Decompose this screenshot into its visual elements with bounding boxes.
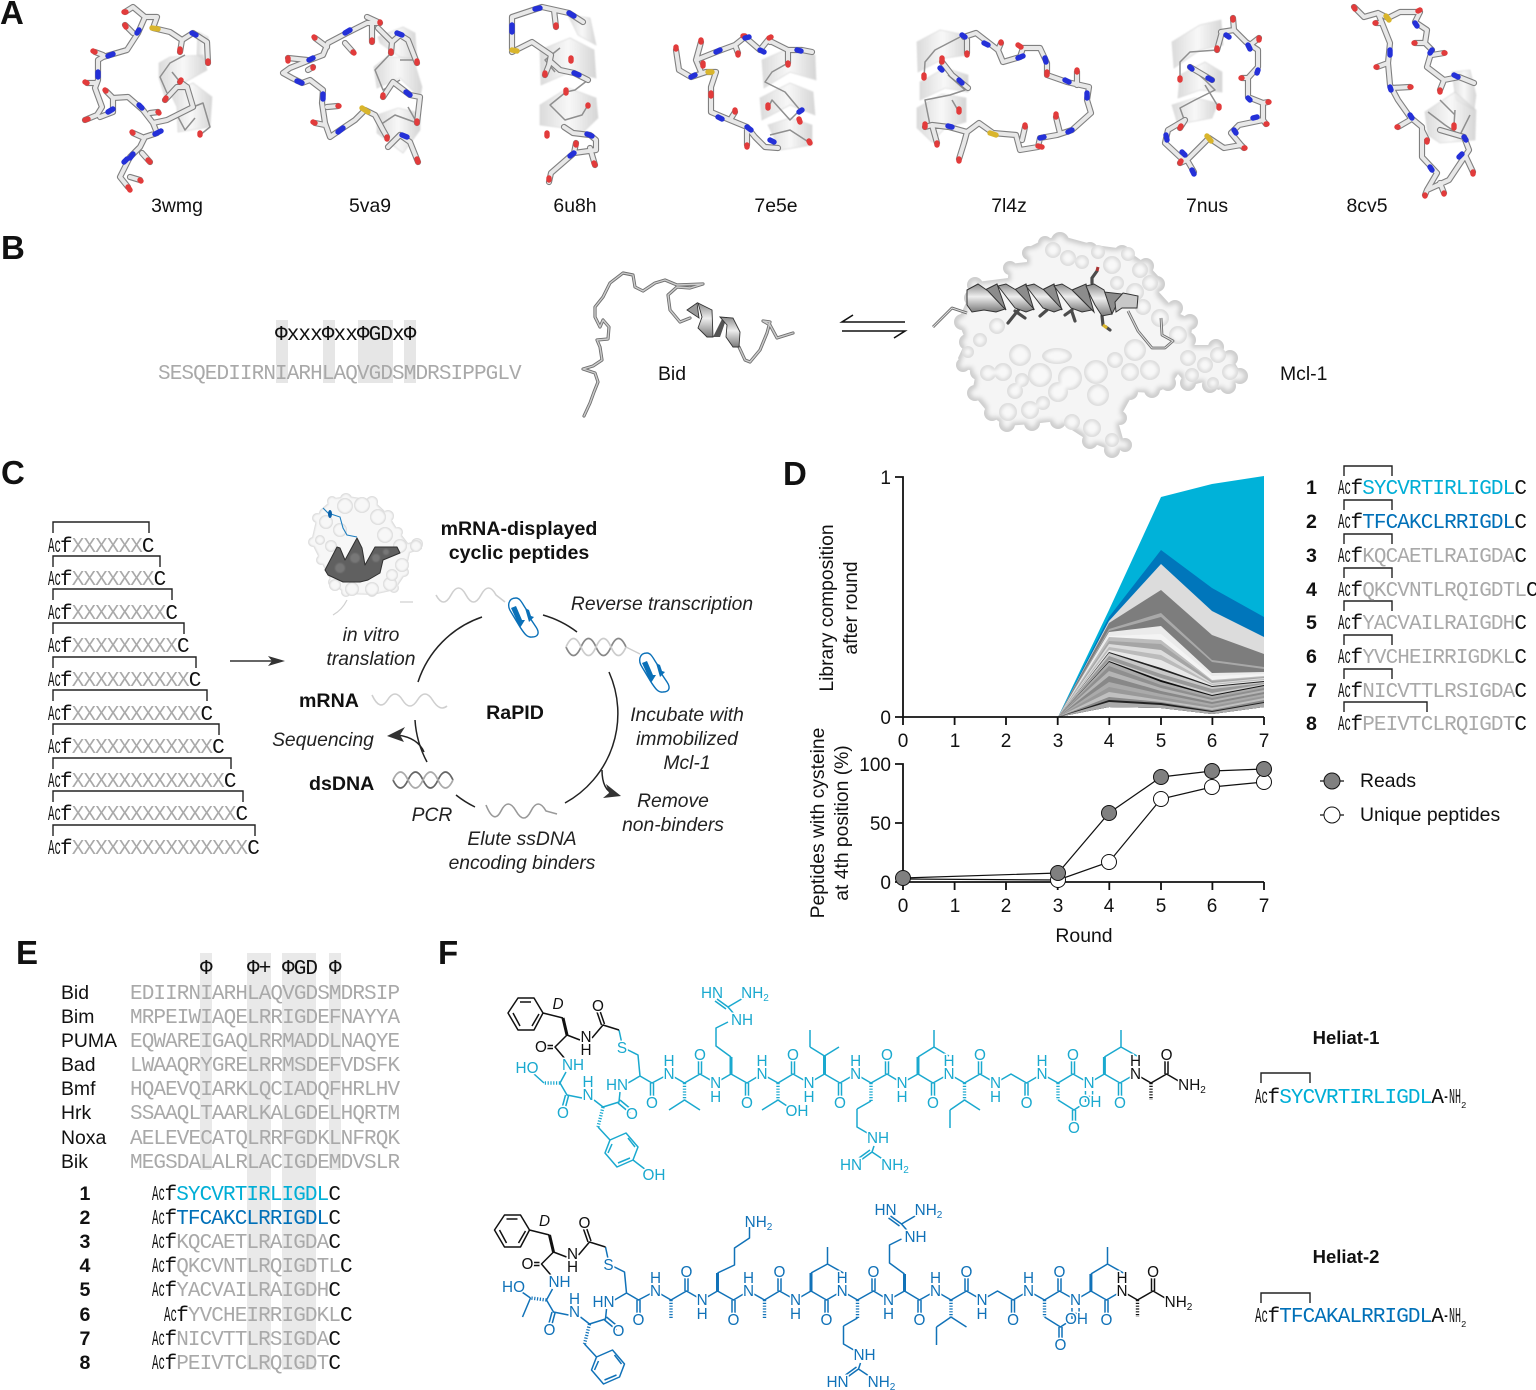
chart: peptides with cysteine at 4th position: 2 [1001,896,1011,917]
chart: library composition stacked area: 2 [1001,731,1011,752]
panel E: sequence alignment: Ac [152,1184,165,1207]
panel D: peptide sequence list: Ac [1338,512,1351,535]
icon: dsDNA with peptide (reverse transcription) [566,638,669,692]
panel D: peptide sequence list: 5 [1306,612,1317,634]
sequence: Heliat-1: -NH [1443,1087,1461,1110]
panel B: Bid sequence with motif: ΦxxxΦxxΦGDxΦ [275,324,417,347]
panel C: cyclic peptide library: Ac [48,603,61,626]
panel F: Heliat-2 chemical structure: N [567,1246,578,1263]
panel D: peptide sequence list: 8 [1306,713,1317,735]
panel E: sequence alignment: Φ+ [247,958,271,981]
chart: library composition stacked area: 4 [1104,731,1115,752]
panel D: peptide sequence list: Ac [1338,681,1351,704]
panel B: Mcl-1 surface with bound helix [933,232,1248,458]
panel D: peptide sequence list: fNICVTTLRSIGDAC [1350,681,1526,704]
panel F: Heliat-1 chemical structure: NNNNN [663,1066,1048,1083]
chart: library composition stacked area: 5 [1156,731,1166,752]
panel F: Heliat-1 chemical structure: NH [1178,1077,1200,1094]
panel E: sequence alignment: Ac [152,1353,165,1376]
icon: ssDNA wave [486,804,557,818]
icon: equilibrium arrows [842,315,905,338]
panel C: cyclic peptide library: fXXXXXXC [60,536,154,559]
panel E: sequence alignment: PUMA [61,1030,117,1052]
panel F: Heliat-2 chemical structure: O [544,1322,556,1339]
label: Bid: Bid [658,363,686,385]
panel F: Heliat-1 chemical structure: O [557,1105,569,1122]
panel F: Heliat-1 chemical structure: OH [643,1167,665,1184]
RaPID cycle ring [415,615,618,807]
panel F: Heliat-1 chemical structure: 2 [903,1165,909,1176]
cycle labels: dsDNA [309,773,374,795]
panel E: sequence alignment: Bad [61,1054,96,1076]
panel F: Heliat-2 chemical structure: H [1116,1270,1128,1287]
panel E: sequence alignment: 5 [80,1279,91,1301]
cycle labels: mRNA [299,690,359,712]
panel F: Heliat-2 chemical structure: NH [904,1229,927,1246]
panel E: sequence alignment: ΦGD [282,958,317,981]
icon: ribosome with nascent peptide [308,493,423,615]
panel A: PDB labels: 7l4z [991,195,1027,217]
icon: mRNA wave with peptide (top) [436,588,538,637]
panel E: sequence alignment: HQAEVQIARKLQCIADQFHRLHV [130,1079,400,1102]
chart: peptides with cysteine at 4th position: 0 [880,873,891,894]
panel F: Heliat-1 chemical structure: O [1161,1047,1173,1064]
panel B: Bid sequence with motif [158,320,522,386]
panel C: cyclic peptide library: Ac [48,569,61,592]
panel C: cyclic peptide library: Ac [48,636,61,659]
panel F: Heliat-1 chemical structure: NH [562,1057,584,1074]
panel F: Heliat-2 chemical structure: HO [502,1279,525,1296]
panel E: sequence alignment: fPEIVTCLRQIGDTC [164,1353,340,1376]
chart: library composition stacked area [817,468,1269,752]
panel F: Heliat-1 chemical structure: HHHHH [663,1053,1048,1070]
sequence: Heliat-2: Ac [1255,1306,1268,1329]
panel F: Heliat-2 chemical structure: HHHHH [650,1270,1034,1287]
cycle labels: Sequencing [272,730,374,751]
panel C: cyclic peptide library: fXXXXXXXXXXXXXXC [60,804,248,827]
panel F: Heliat-1 chemical structure: HN [606,1077,628,1094]
cycle labels: in vitro [343,625,400,646]
panel E: sequence alignment: fYVCHEIRRIGDKLC [176,1305,352,1328]
panel F: Heliat-1 chemical structure: HHHHH [710,1089,1095,1106]
chart: library composition stacked area: 6 [1207,731,1217,752]
panel C: cyclic peptide library: Ac [48,804,61,827]
panel E: sequence alignment: Φ [200,958,213,981]
panel F: Heliat-1 chemical structure: NH [741,985,763,1002]
chart: peptides with cysteine at 4th position: 1 [950,896,960,917]
panel E: sequence alignment: EDIIRNIARHLAQVGDSMDRSIP [130,983,399,1006]
sequence: Heliat-1: fSYCVRTIRLIGDLA [1268,1087,1444,1110]
panel C: cyclic peptide library: Ac [48,536,61,559]
panel label B: B [1,229,25,266]
panel F: Heliat-2 chemical structure: H [569,1291,580,1308]
panel E: sequence alignment: fKQCAETLRAIGDAC [164,1232,340,1255]
panel F: Heliat-1 chemical structure: NH [867,1130,889,1147]
panel C: cyclic peptide library: fXXXXXXXXXXXXXC [60,771,236,794]
panel E: sequence alignment: 4 [80,1255,91,1277]
chart: peptides with cysteine at 4th position: 3 [1053,896,1063,917]
panel F: Heliat-1 chemical structure: N [580,1029,592,1046]
chart: peptides with cysteine at 4th position: Peptides with cysteine [808,728,829,918]
heading: mRNA-displayed cyclic peptides: cyclic peptides [449,542,589,564]
panel F: Heliat-2 chemical structure: NH [1165,1294,1187,1311]
panel E: sequence alignment: EQWAREIGAQLRRMADDLNAQYE [130,1031,399,1054]
panel D: peptide sequence list: 4 [1306,579,1317,601]
panel label E: E [16,934,38,971]
panel E: sequence alignment: 1 [80,1183,91,1205]
cycle labels: immobilized [636,729,739,750]
panel F: Heliat-1 chemical structure: O [1068,1120,1080,1137]
chart: peptides with cysteine at 4th position: 50 [870,814,891,835]
panel E: sequence alignment: 7 [80,1328,91,1350]
panel F: Heliat-2 chemical structure: S [603,1257,614,1274]
panel D: peptide sequence list: 6 [1306,646,1317,668]
panel F: Heliat-1 chemical structure: HO [516,1060,539,1077]
chart: library composition stacked area: 3 [1053,731,1063,752]
panel F: Heliat-2 chemical structure: HN [874,1202,897,1219]
panel C: cyclic peptide library: fXXXXXXXXC [60,603,177,626]
panel F: Heliat-1 chemical structure: H [1130,1053,1141,1070]
sequence: Heliat-2: fTFCAKALRRIGDLA [1268,1306,1444,1329]
panel F: Heliat-2 chemical structure: O [613,1323,625,1340]
panel F: Heliat-2 chemical structure: H [567,1259,578,1276]
panel F: Heliat-1 chemical structure: OOOOO [694,1047,1079,1064]
chart: peptides with cysteine at 4th position: 6 [1207,896,1217,917]
icon: dsDNA helix [393,772,453,788]
chart: peptides with cysteine at 4th position: 5 [1156,896,1166,917]
chart: library composition stacked area: 7 [1259,731,1269,752]
chart: library composition stacked area: 0 [898,731,908,752]
panel A: PDB labels: 3wmg [151,195,203,217]
panel F: Heliat-1 chemical structure: NH [731,1012,753,1029]
panel F: Heliat-1 chemical structure: NH [881,1157,903,1174]
chart: peptides with cysteine at 4th position: 100 [859,755,891,776]
heading: Heliat-2: Heliat-2 [1313,1246,1379,1267]
panel D: peptide sequence list: 3 [1306,545,1317,567]
panel E: sequence alignment: Ac [164,1305,177,1328]
chart: library composition stacked area: Library composition [817,524,838,692]
label: Mcl-1: Mcl-1 [1280,363,1327,385]
panel C: cyclic peptide library: fXXXXXXXXXXXXC [60,737,224,760]
cycle labels: Remove [637,791,709,812]
cycle labels: Elute ssDNA [467,829,577,850]
panel D: peptide sequence list: 1 [1306,477,1317,499]
chart: library composition stacked area: 0 [880,708,891,729]
panel E: sequence alignment: fNICVTTLRSIGDAC [164,1329,340,1352]
panel A: PDB labels: 8cv5 [1347,195,1387,217]
legend: reads and unique peptides: Unique peptides [1360,804,1500,826]
panel D: peptide sequence list: 2 [1306,511,1317,533]
panel D: peptide sequence list: fKQCAETLRAIGDAC [1350,546,1526,569]
panel D: peptide sequence list: Ac [1338,647,1351,670]
panel F: Heliat-2 chemical structure [494,1202,1193,1390]
panel D: peptide sequence list: Ac [1338,546,1351,569]
panel C: cyclic peptide library: Ac [48,838,61,861]
panel F: Heliat-2 chemical structure: O [522,1256,534,1273]
panel C: cyclic peptide library: fXXXXXXXXXXXC [60,704,212,727]
panel F: Heliat-2 chemical structure: NNNNN [650,1283,1034,1300]
panel E: sequence alignment: fSYCVRTIRLIGDLC [164,1184,340,1207]
panel F: Heliat-2 chemical structure: N [1116,1283,1128,1300]
chart: peptides with cysteine at 4th position: at 4th position (%) [832,745,853,901]
panel A: structure 7l4z [917,30,1091,161]
panel A: PDB labels: 7nus [1186,195,1228,217]
panel E: sequence alignment [61,953,400,1376]
chart: library composition stacked area: 1 [950,731,960,752]
panel E: sequence alignment: Hrk [61,1102,91,1124]
sequence: Heliat-1: Ac [1255,1087,1268,1110]
panel F: Heliat-1 chemical structure: 2 [763,993,769,1004]
panel F: Heliat-1 chemical structure: H [580,1042,592,1059]
panel F: Heliat-2 chemical structure: N [569,1304,580,1321]
panel F: Heliat-1 chemical structure: OH [786,1103,808,1120]
panel E: sequence alignment: MEGSDALALRLACIGDEMDVSLR [130,1152,400,1175]
panel A: structure 7nus [1165,18,1269,174]
panel C: cyclic peptide library: fXXXXXXXXXXXXXXXC [60,838,259,861]
panel D: peptide sequence list: fSYCVRTIRLIGDLC [1350,478,1526,501]
cycle labels: Reverse transcription [571,594,753,615]
panel F: Heliat-1 chemical structure: O [626,1106,638,1123]
sequence: Heliat-2: 2 [1461,1320,1466,1330]
panel A: structure 3wmg [85,7,212,190]
panel E: sequence alignment: Ac [152,1208,165,1231]
panel E: sequence alignment: Bik [61,1151,88,1173]
panel A: PDB labels: 7e5e [754,195,798,217]
panel F: Heliat-2 chemical structure: 2 [767,1222,773,1233]
cycle labels: RaPID [486,702,544,724]
panel F: Heliat-1 chemical structure: O [535,1039,547,1056]
panel F: Heliat-2 chemical structure: NH [548,1274,571,1291]
panel F: Heliat-2 chemical structure: HN [592,1294,615,1311]
arrow: sequencing branch [387,727,424,752]
panel F: Heliat-2 chemical structure: O [579,1215,591,1232]
panel E: sequence alignment: 3 [80,1231,91,1253]
panel C: cyclic peptide library: fXXXXXXXC [60,569,166,592]
panel F: Heliat-1 chemical structure: OOOOOO [646,1095,1126,1112]
panel F: Heliat-2 chemical structure: O [1147,1264,1159,1281]
panel E: sequence alignment: fYACVAILRAIGDHC [164,1280,340,1303]
panel E: sequence alignment: Bmf [61,1078,96,1100]
panel label D: D [783,455,807,492]
panel F: Heliat-1 chemical structure: N [582,1087,594,1104]
panel E: sequence alignment: Noxa [61,1127,106,1149]
panel C: cyclic peptide library: Ac [48,737,61,760]
panel F: Heliat-2 chemical structure: NNNNN [697,1292,1081,1309]
sequence: Heliat-2: -NH [1443,1306,1461,1329]
panel F: Heliat-2 chemical structure: O [1055,1337,1067,1354]
panel A: structure 5va9 [283,17,422,162]
panel F: Heliat-1 chemical structure: O [592,998,604,1015]
arrow: library to cycle [230,656,285,666]
panel E: sequence alignment: Ac [152,1329,165,1352]
panel D: peptide sequence list: Ac [1338,613,1351,636]
cycle labels: translation [327,649,415,670]
panel D: peptide sequence list: fPEIVTCLRQIGDTC [1350,714,1526,737]
panel F: Heliat-2 chemical structure: 2 [1187,1302,1193,1313]
arrow: remove non-binders branch [602,770,621,798]
panel F: Heliat-2 chemical structure: 2 [937,1210,943,1221]
heading: Heliat-1: Heliat-1 [1313,1027,1379,1048]
panel E: sequence alignment: AELEVECATQLRRFGDKLNFRQK [130,1128,400,1151]
panel C: cyclic peptide library: Ac [48,704,61,727]
icon: mRNA wave (left) [372,694,447,708]
chart: peptides with cysteine at 4th position: 7 [1259,896,1269,917]
panel F: Heliat-2 chemical structure: OH [1065,1311,1088,1328]
cycle labels [272,594,753,874]
heading: mRNA-displayed cyclic peptides: mRNA-displayed [441,518,597,540]
panel A: structure 7e5e [676,36,816,150]
panel F: Heliat-1 chemical structure: D [552,996,564,1013]
panel A: PDB labels: 6u8h [553,195,597,217]
panel D: peptide sequence list: fQKCVNTLRQIGDTLC [1350,580,1536,603]
panel label C: C [1,454,25,491]
panel F: Heliat-1 chemical structure: HN [701,985,723,1002]
cycle labels: non-binders [622,815,724,836]
panel F: Heliat-2 chemical structure: NH [915,1202,937,1219]
panel E: sequence alignment: fTFCAKCLRRIGDLC [164,1208,340,1231]
panel E: sequence alignment: Bid [61,982,89,1004]
cycle labels: Incubate with [630,705,744,726]
panel E: sequence alignment: Ac [152,1232,165,1255]
sequence: Heliat-1 [1255,1073,1466,1111]
panel C: cyclic peptide library [48,522,259,861]
panel D: peptide sequence list: 7 [1306,680,1317,702]
legend: reads and unique peptides [1320,770,1500,826]
panel E: sequence alignment: 6 [80,1304,91,1326]
panel D: peptide sequence list: fTFCAKCLRRIGDLC [1350,512,1526,535]
panel F: Heliat-2 chemical structure: NH [745,1214,767,1231]
chart: library composition stacked area: 1 [880,468,891,489]
legend: reads and unique peptides: Reads [1360,770,1416,792]
panel F: Heliat-1 chemical structure: N [1130,1066,1141,1083]
panel C: cyclic peptide library: fXXXXXXXXXXC [60,670,201,693]
chart: peptides with cysteine at 4th position: Round [1055,925,1113,947]
panel A: structure 8cv5 [1354,7,1476,196]
sequence: Heliat-2 [1255,1293,1466,1330]
panel E: sequence alignment: Ac [152,1256,165,1279]
panel F: Heliat-2 chemical structure: NH [853,1347,876,1364]
panel F: Heliat-1 chemical structure: H [582,1074,594,1091]
panel F: Heliat-1 chemical structure: NNNNN [710,1075,1095,1092]
panel D: peptide sequence list: fYACVAILRAIGDHC [1350,613,1526,636]
chart: peptides with cysteine at 4th position: 4 [1104,896,1115,917]
sequence: Heliat-1: 2 [1461,1101,1466,1111]
panel A: structure 6u8h [512,7,598,182]
panel B: Bid sequence with motif: SESQEDIIRNIARHLAQVGDSMDRSIPPGLV [158,363,522,386]
panel F: Heliat-2 chemical structure: D [539,1213,550,1230]
panel E: sequence alignment: LWAAQRYGRELRRMSDEFVDSFK [130,1055,400,1078]
panel C: cyclic peptide library: Ac [48,670,61,693]
panel D: peptide sequence list: Ac [1338,580,1351,603]
panel A: PDB labels [151,195,1387,217]
panel E: sequence alignment: Ac [152,1280,165,1303]
panel D: peptide sequence list: Ac [1338,478,1351,501]
panel F: Heliat-2 chemical structure: OOOOO [681,1264,1066,1281]
panel E: sequence alignment: MRPEIWIAQELRRIGDEFNAYYA [130,1007,400,1030]
panel E: sequence alignment: 8 [80,1352,91,1374]
panel F: Heliat-2 chemical structure: HHHHH [697,1306,1081,1323]
panel A: PDB labels: 5va9 [349,195,391,217]
panel E: sequence alignment: 2 [80,1207,91,1229]
panel label F: F [438,934,458,971]
panel B: Bid cartoon [583,273,793,416]
panel F: Heliat-1 chemical structure: S [617,1040,627,1057]
panel E: sequence alignment: Bim [61,1006,94,1028]
cycle labels: Mcl-1 [663,753,711,774]
panel E: sequence alignment: fQKCVNTLRQIGDTLC [164,1256,352,1279]
panel D: peptide sequence list: Ac [1338,714,1351,737]
chart: library composition stacked area: after round [841,561,862,655]
panel F: Heliat-1 chemical structure: HN [840,1157,862,1174]
panel F: Heliat-1 chemical structure [508,985,1206,1184]
panel D: peptide sequence list [1306,466,1536,737]
panel D: peptide sequence list: fYVCHEIRRIGDKLC [1350,647,1526,670]
panel F: Heliat-2 chemical structure: OOOOOO [633,1312,1113,1329]
cycle labels: encoding binders [449,853,596,874]
panel E: sequence alignment: SSAAQLTAARLKALGDELHQRTM [130,1103,399,1126]
panel F: Heliat-1 chemical structure: OH [1079,1094,1101,1111]
panel E: sequence alignment: Φ [329,958,342,981]
panel F: Heliat-1 chemical structure: 2 [1200,1085,1206,1096]
panel C: cyclic peptide library: fXXXXXXXXXC [60,636,189,659]
cycle labels: PCR [412,805,452,826]
chart: peptides with cysteine at 4th position: 0 [898,896,908,917]
panel C: cyclic peptide library: Ac [48,771,61,794]
chart: peptides with cysteine at 4th position [808,728,1272,947]
